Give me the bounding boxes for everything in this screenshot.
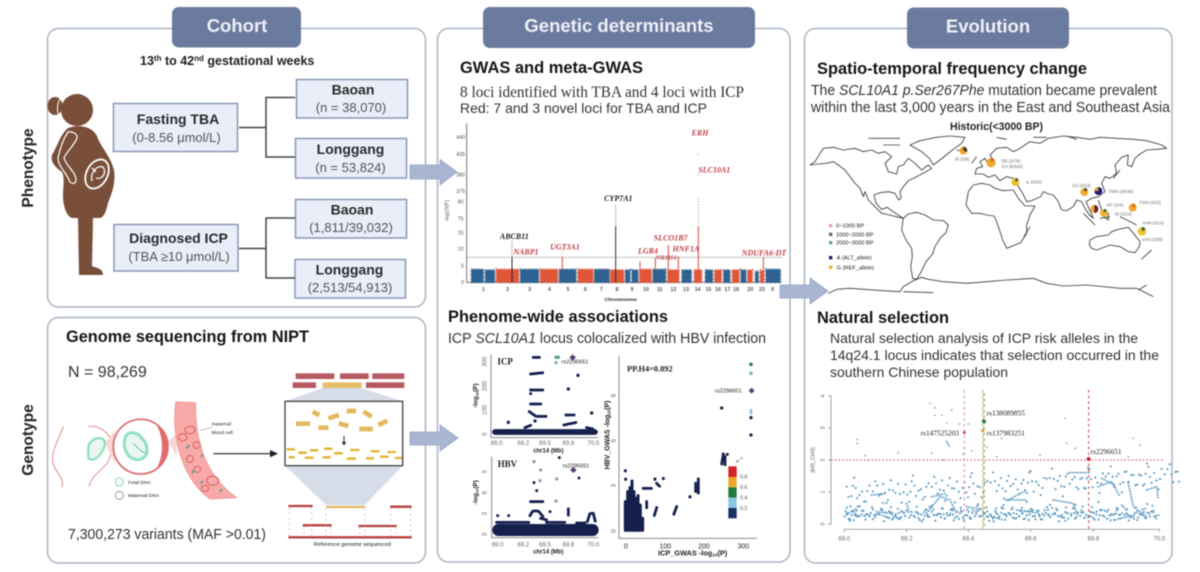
map outlines [810,136,1167,297]
illustration: sequencing reads: Reference genome sequenced [314,542,391,548]
chart: colocalization scatter: 10 [712,553,718,558]
chart: HBV locus plot: 3 [483,511,489,515]
chart: HBV locus plot: 6 [483,490,489,494]
natural selection description: 14q24.1 locus indicates that selection occurred in the [830,347,1159,363]
chart: ICP locus plot: 69.5 [539,441,551,447]
variants count: 7,300,273 variants (MAF >0.01) [68,527,266,543]
chart: colocalization scatter: 0.8 [740,475,747,481]
arrow: genome sequencing to genetic determinants [410,425,458,451]
chart: manhattan plot: SLC10A1 [698,165,730,174]
chart: iHS scatter: rs2296651 [1091,447,1122,456]
chart: manhattan plot: Chromosome [605,297,637,303]
pie labels [955,157,1164,242]
chart: manhattan plot: 16 [715,287,721,293]
chart: iHS scatter: 1 [821,490,827,493]
chart: HBV locus plot: chr14 (Mb) [533,549,563,555]
chart: manhattan plot: 18 [733,287,739,293]
chart: HBV locus plot: 69.2 [518,542,530,548]
chart: HBV locus plot: 70.0 [588,542,600,548]
gestational weeks heading: gestational weeks [204,54,314,68]
chart: HBV locus plot [473,457,600,555]
chart: ICP locus plot: (P) [473,383,480,392]
chart: manhattan plot: 22 [759,287,765,293]
chart: ICP locus plot: 300 [483,356,489,367]
heading: GWAS: GWAS and meta-GWAS [460,58,643,77]
chart: manhattan plot: 12 [670,287,676,293]
chart: HBV locus plot: HBV [498,459,518,469]
allele frequency pies [959,147,1146,236]
arrow: to sequencing [213,450,278,457]
natural selection description: Natural selection analysis of ICP risk alleles in the [830,330,1138,346]
map legend: G (REF_allele) [837,265,874,271]
GWAS description line 2: Red: 7 and 3 novel loci for TBA and ICP [460,100,707,116]
chart: ICP locus plot: 10 [475,391,480,396]
chart: manhattan plot: 375 [456,189,465,195]
natural selection description [830,330,1159,380]
chart: manhattan plot: LGR4 [637,247,658,256]
chart: colocalization scatter: PP.H4=0.892 [627,364,673,373]
box: diagnosed ICP: (TBA ≥10 μmol/L) [128,249,230,264]
pie labels: TWN (26/40) [1108,189,1134,194]
pie labels: IS (2/8) [955,157,970,162]
chart: ICP locus plot: ICP [497,357,513,367]
chart: HBV locus plot: 9 [483,469,489,473]
chart: iHS scatter: rs147525203 [921,429,959,438]
chart: manhattan plot: 20 [747,287,753,293]
heading: phenome-wide associations: Phenome-wide associations [448,308,668,326]
arrow: genetic determinants to evolution [780,278,828,304]
chart: ICP locus plot: rs2296651 [562,360,588,366]
chart: HBV locus plot: 0 [483,532,489,536]
box: Longgang n=53,824: Longgang [317,141,384,157]
chart: iHS scatter: 69.4 [963,537,975,543]
chart: manhattan plot: 8 [616,287,619,293]
chart: colocalization scatter: ICP_GWAS -log [658,549,712,558]
pie labels: ID (2/14) [1115,212,1132,217]
label: genotype: Genotype [20,404,37,476]
chart: ICP locus plot: chr14 (Mb) [533,449,563,455]
chart: manhattan plot: 15 [705,287,711,293]
chart: colocalization scatter: 100 [660,543,671,550]
chart: manhattan plot: 5 [461,264,464,270]
chart: colocalization scatter: 0.2 [740,506,747,512]
box: Baoan 1,811/39,032 [296,200,406,238]
chart: iHS scatter: rs137983251 [987,429,1025,438]
illustration: fetal DNA in maternal blood: Fetal DNA [128,480,152,486]
label: phenotype: Phenotype [20,128,37,208]
chart: manhattan plot: NABP1 [512,247,539,256]
evolution header: Evolution [946,16,1030,36]
chart: manhattan plot: 3 [528,287,531,293]
spatio-temporal description line 2: within the last 3,000 years in the East and Southeast Asia [810,100,1171,116]
chart: colocalization scatter [604,356,757,558]
chart: manhattan plot: 15 [458,231,464,237]
chart: HBV locus plot: rs2296651 [563,463,589,469]
panel: evolution [804,8,1180,563]
box: fasting TBA [114,104,238,152]
chart: manhattan plot: 6 [584,287,587,293]
chart: ICP locus plot [473,354,600,455]
chart: HBV locus plot: 69.0 [492,542,504,548]
pie labels: VAN (2/14) [1143,221,1164,226]
map legend [829,224,874,271]
box: fasting TBA: Fasting TBA [137,111,219,127]
chart: manhattan plot: CYP7A1 [604,194,633,203]
cohort header: Cohort [207,15,267,36]
map legend: A (ALT_allele) [837,256,872,262]
chart: iHS scatter: 69.6 [1025,537,1037,543]
illustration: fetal DNA in maternal blood: blood cell [212,430,233,436]
connector: TBA branches [239,98,295,157]
box: Longgang n=53,824 [296,138,406,178]
chart: HBV locus plot: -log [473,493,480,505]
chart: iHS scatter [811,390,1180,543]
box: diagnosed ICP: Diagnosed ICP [129,230,228,246]
arrow: cohort to genetic determinants [410,160,457,185]
chart: manhattan plot: 10 [643,287,649,293]
chart: manhattan plot: 11 [657,287,663,293]
chart: manhattan plot: 75 [458,216,464,222]
chart: manhattan plot: 380 [456,172,465,178]
genetic determinants header: Genetic determinants [524,15,714,36]
chart: world map with allele pies [810,136,1167,297]
chart: ICP locus plot: 69.0 [491,441,503,447]
chart: manhattan plot: 7 [600,287,603,293]
illustration: sequencing reads [285,373,412,548]
chart: colocalization scatter: (P) [717,549,728,558]
gestational weeks heading: nd [194,54,204,63]
box: Longgang 2,513/54,913 [295,260,406,298]
chart: colocalization scatter: 0 [624,543,628,550]
chart: ICP locus plot: 69.2 [518,441,530,447]
panel: genome sequencing [48,318,426,563]
illustration: fetal DNA in maternal blood: Maternal DNA [128,493,160,499]
sample size: N = 98,269 [68,364,147,381]
map legend: 2000~3000 BP [836,241,874,247]
chart: iHS scatter: 2 [821,458,827,461]
chart: iHS scatter: 4 [821,394,827,397]
chart: manhattan plot: SLCO1B7 [654,234,689,243]
chart: colocalization scatter: 0 [610,529,617,533]
genetic determinants header [483,7,755,48]
pie labels: IL (0/32) [1026,180,1043,185]
pie labels: VAN (2/28) [1142,237,1163,242]
box: Baoan n=38,070: (n = 38,070) [316,100,386,115]
chart: manhattan plot: 1 [482,287,485,293]
chart: ICP locus plot: 100 [483,404,489,415]
chart: manhattan plot: 9 [631,287,634,293]
chart: ICP locus plot: 200 [483,380,489,391]
box: Longgang 2,513/54,913: (2,513/54,913) [308,280,392,295]
pie labels: CH (6/262) [1002,164,1023,169]
chart: manhattan plot: 0 [461,280,464,286]
GWAS description line 1: 8 loci identified with TBA and 4 loci with ICP [460,84,744,101]
chart: manhattan plot: ABCB11 [499,232,529,241]
chart: manhattan plot: 5 [567,287,570,293]
chart: manhattan plot: NR1H4 [654,254,677,261]
chart: manhattan plot: 17 [724,287,730,293]
chart: colocalization scatter: (P) [604,401,611,410]
phenome-wide description: ICP SCL10A1 locus colocalized with HBV infection [448,331,766,347]
map legend: 0~1000 BP [836,224,864,230]
map title: Historic(<3000 BP) [950,121,1043,133]
chart: manhattan plot: 10 [458,247,464,253]
chart: manhattan plot: X [771,287,775,293]
chart: manhattan plot: ERH [691,128,709,137]
chart: colocalization scatter: 3 [610,484,617,488]
chart: manhattan plot: 435 [456,152,465,158]
heading: spatio-temporal: Spatio-temporal frequency change [817,60,1087,78]
chart: HBV locus plot: 10 [475,488,480,493]
chart: iHS scatter: 69.2 [901,537,913,543]
gestational weeks heading: to 42 [161,54,194,68]
connector: ICP branches [239,218,295,278]
chart: iHS scatter: rs138089855 [987,409,1025,418]
cohort header [172,7,301,48]
chart: colocalization scatter: 0.6 [740,485,747,491]
box: Baoan 1,811/39,032: (1,811/39,032) [309,220,393,235]
chart: ICP locus plot: -log [473,396,480,408]
chart: manhattan plot: 80 [458,200,464,206]
chart: colocalization scatter: 10 [606,409,611,415]
illustration: fetal DNA in maternal blood: maternal [212,422,231,428]
box: fasting TBA: (0-8.56 μmol/L) [132,130,221,145]
panel: genetic determinants [438,7,790,562]
evolution header [907,8,1069,48]
chart: manhattan plot: 4 [548,287,551,293]
pie labels: MY (2/4) [1107,203,1124,208]
box: Baoan n=38,070: Baoan [332,82,374,98]
chart: HBV locus plot: 69.5 [539,542,551,548]
illustration: fetal DNA in maternal blood [53,402,237,499]
box: Baoan n=38,070 [296,80,408,118]
heading: natural selection: Natural selection [817,309,949,327]
chart: manhattan plot [445,123,787,303]
chart: colocalization scatter: HBV_GWAS -log [604,415,611,469]
box: Baoan 1,811/39,032: Baoan [331,202,373,218]
pie labels: DE (2/78) [1002,159,1021,164]
chart: manhattan plot: NDUFA6-DT [741,248,787,257]
chart: manhattan plot: -log10(P) [445,200,451,222]
chart: manhattan plot: 14 [695,287,701,293]
chart: iHS scatter: |iHS_CHS| [811,447,817,473]
chart: colocalization scatter: 200 [698,543,710,550]
chart: manhattan plot: UGT3A1 [550,242,580,251]
chart: manhattan plot: 2 [506,287,509,293]
chart: manhattan plot: 440 [456,135,465,141]
chart: iHS scatter: 69.0 [839,537,851,543]
chart: HBV locus plot: (P) [473,480,480,489]
box: Longgang n=53,824: (n = 53,824) [315,160,386,175]
box: Longgang 2,513/54,913: Longgang [316,262,383,278]
chart: colocalization scatter: rs2296651 [715,389,742,395]
gestational weeks heading: th [154,54,162,63]
chart: HBV locus plot: 69.8 [563,542,575,548]
chart: colocalization scatter: r² [736,459,740,465]
natural selection description: southern Chinese population [830,364,1008,380]
chart: colocalization scatter: 9 [610,394,617,398]
chart: iHS scatter: 70.0 [1154,537,1166,543]
chart: manhattan plot: HNF1A [672,245,699,254]
chart: colocalization scatter: 6 [610,439,617,443]
chart: manhattan plot: 13 [683,287,689,293]
gestational weeks heading: 13 [140,54,154,68]
chart: colocalization scatter: 0.4 [740,495,747,501]
chart: iHS scatter: 69.8 [1088,537,1100,543]
pie labels: FSM (4/22) [1139,200,1162,205]
pie labels: GX (2/12) [1072,183,1091,188]
chart: colocalization scatter: 300 [738,543,749,550]
heading: genome sequencing: Genome sequencing from NIPT [66,328,309,346]
box: diagnosed ICP [114,224,238,271]
chart: iHS scatter: 3 [821,426,827,429]
map legend: 1000~2000 BP [836,232,874,238]
chart: iHS scatter: 0 [821,522,827,525]
chart: ICP locus plot: 0 [483,432,489,436]
spatio-temporal description line 1: The SCL10A1 p.Ser267Phe mutation became prevalent [811,83,1157,99]
chart: ICP locus plot: 69.8 [563,441,575,447]
chart: ICP locus plot: 70.0 [588,441,600,447]
icon: pregnant woman silhouette [48,94,114,275]
panel: cohort [48,7,426,307]
